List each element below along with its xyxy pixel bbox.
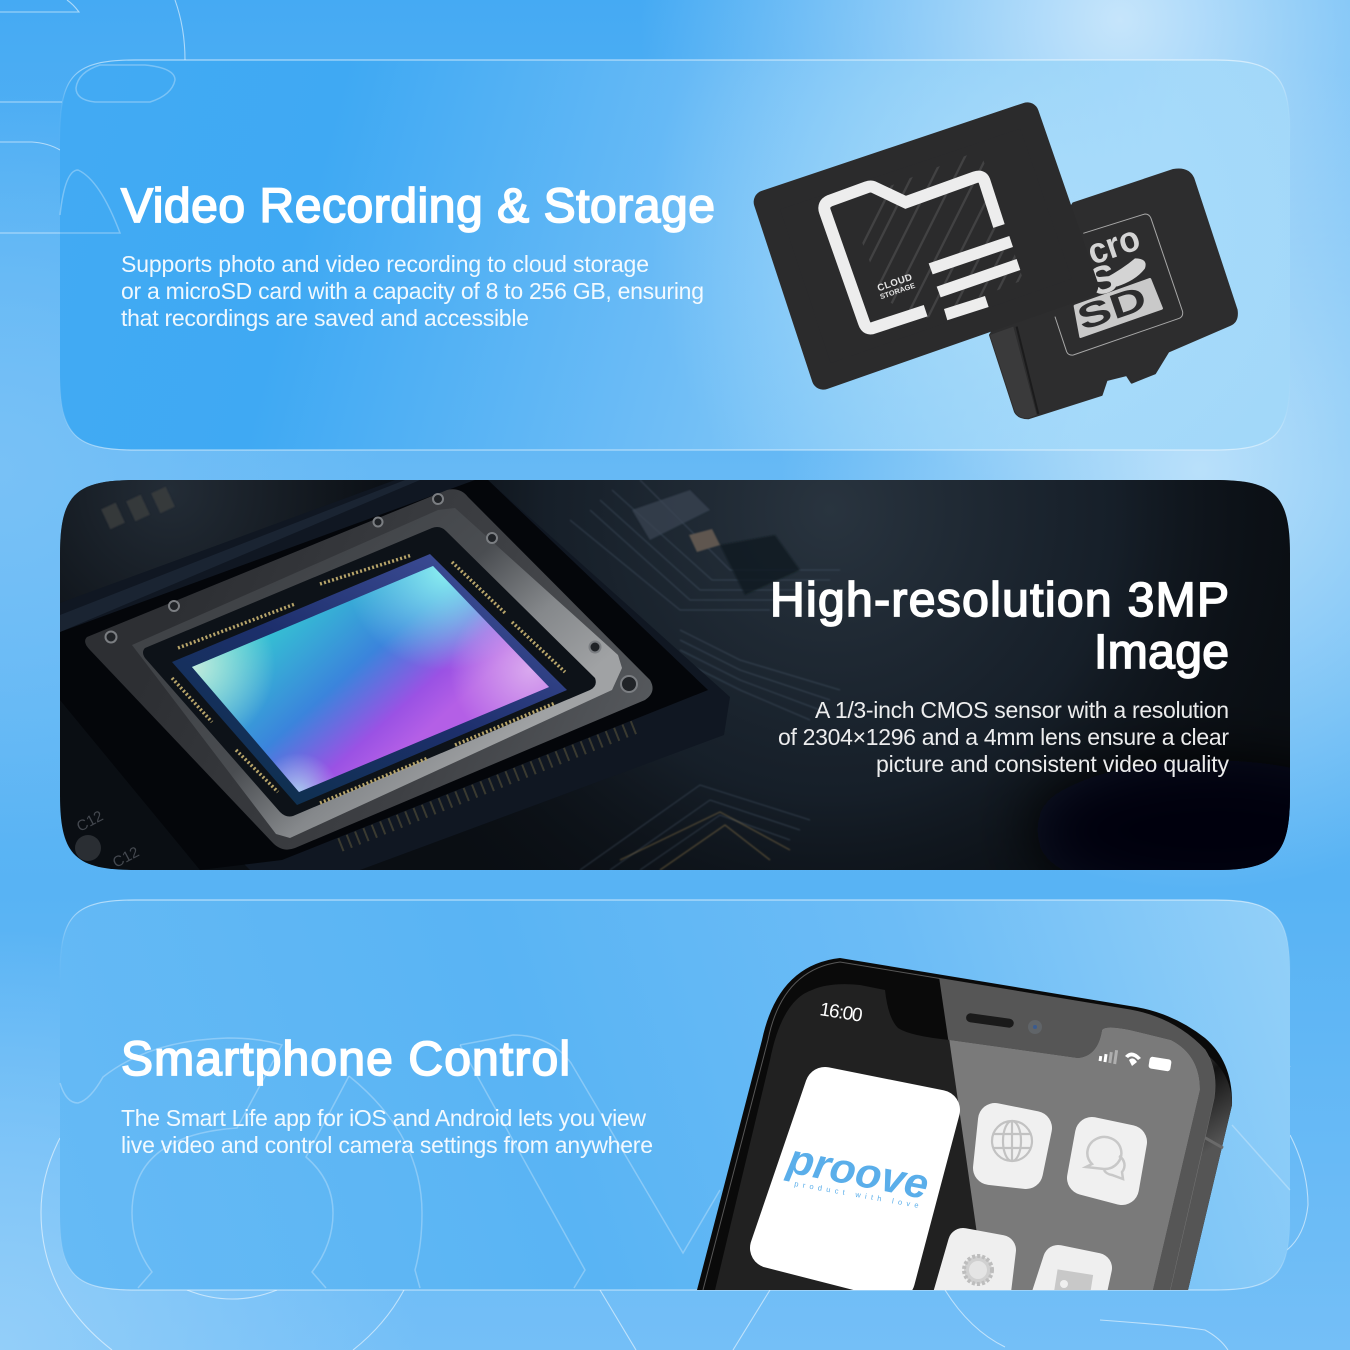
sensor metal frame	[85, 489, 653, 850]
board silkscreen labels	[78, 811, 140, 866]
folder outline icon	[824, 177, 999, 328]
app tile: camera settings	[948, 1243, 1001, 1300]
phone screen	[715, 984, 1200, 1290]
text: sensor description	[778, 697, 1230, 777]
icon: cloud storage card	[765, 90, 1087, 378]
heading: smartphone control: Smartphone Control	[121, 1033, 570, 1086]
circuit board photo background	[60, 480, 1290, 870]
panel 1 background	[60, 60, 1290, 450]
text: smartphone description	[121, 1105, 653, 1158]
smartphone illustration	[697, 958, 1240, 1310]
text: video recording description: Supports photo and video recording to cloud storage	[121, 251, 649, 277]
phone clock: 16:00	[818, 999, 864, 1027]
board silkscreen labels: C12	[110, 844, 142, 872]
screws	[106, 494, 637, 692]
app tile: globe	[990, 1120, 1035, 1172]
faint logo shapes inside panel 1	[60, 65, 175, 233]
proove logo: proove	[783, 1135, 933, 1208]
microSD logo lettering: cro	[1082, 217, 1145, 273]
app tile: contacts	[1045, 1260, 1097, 1310]
panel: video recording and storage	[60, 60, 1290, 450]
text: sensor description: A 1/3-inch CMOS sensor with a resolution	[815, 697, 1229, 723]
microSD logo lettering: SD	[1073, 279, 1152, 338]
panel: smartphone control	[60, 900, 1290, 1310]
board capacitor	[75, 835, 101, 861]
sensor die	[172, 554, 567, 805]
icon: microSD card	[990, 169, 1237, 418]
app tile: chat	[1084, 1134, 1130, 1188]
sensor active area	[192, 566, 549, 792]
microSD logo lettering: S	[1084, 255, 1123, 305]
sensor gold contact pads	[172, 555, 565, 803]
phone speaker and camera	[966, 1013, 1042, 1034]
circuit traces	[570, 480, 840, 870]
text: smartphone description: live video and control camera settings from anywhere	[121, 1132, 653, 1158]
text: video recording description: that recordings are saved and accessible	[121, 305, 529, 331]
blurred dark area	[1027, 752, 1290, 870]
circuit components	[101, 487, 800, 595]
phone body	[697, 958, 1232, 1290]
panel 3 background	[60, 900, 1290, 1290]
heading: high-resolution 3MP image: High-resolution 3MP	[770, 574, 1229, 627]
faint logo outlines inside panel 3	[60, 1035, 1290, 1288]
panel: high-resolution image	[60, 480, 1290, 870]
heading: high-resolution 3MP image	[770, 574, 1229, 679]
status icons	[1099, 1050, 1172, 1072]
camera module housing	[60, 480, 730, 870]
text: sensor description: of 2304×1296 and a 4mm lens ensure a clear	[778, 724, 1229, 750]
housing pin rows	[340, 725, 640, 845]
phone bezel reflection	[939, 979, 1215, 1290]
text: video recording description	[121, 251, 704, 331]
text: sensor description: picture and consistent video quality	[876, 751, 1230, 777]
antenna band	[1205, 1136, 1224, 1150]
heading: video recording and storage: Video Recording & Storage	[121, 180, 715, 233]
logo tagline: product with love	[794, 1179, 919, 1210]
text: video recording description: or a microSD card with a capacity of 8 to 256 GB, ensuring	[121, 278, 704, 304]
heading: high-resolution 3MP image: Image	[1094, 626, 1229, 679]
cloud storage label: STORAGE	[879, 281, 916, 301]
text: smartphone description: The Smart Life app for iOS and Android lets you view	[121, 1105, 646, 1131]
app tile: proove	[770, 1087, 940, 1280]
board silkscreen labels: C12	[74, 808, 106, 836]
cloud storage label: CLOUD	[876, 272, 914, 294]
microSD logo lettering	[1073, 217, 1162, 338]
